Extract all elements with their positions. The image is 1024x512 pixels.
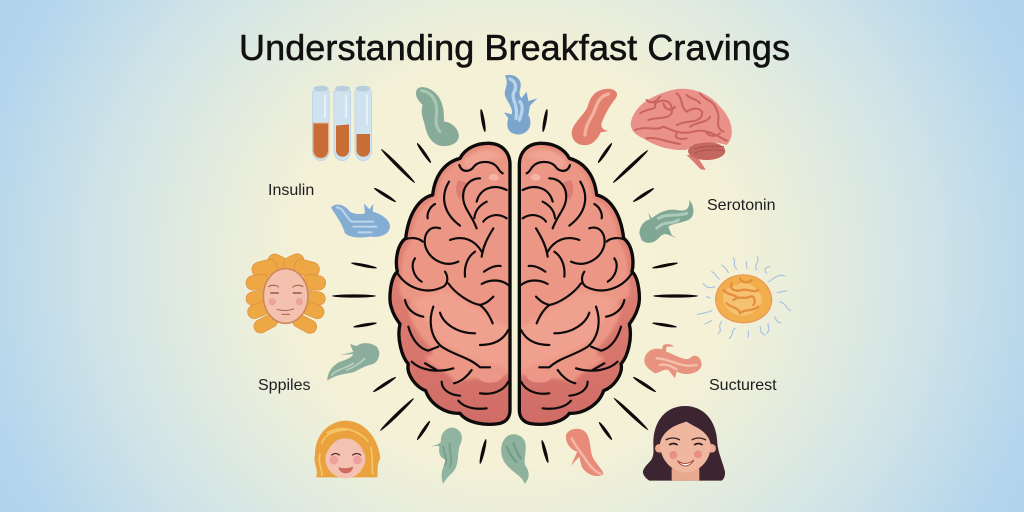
icon: green wisp left (327, 343, 379, 381)
label: Serotonin: Serotonin (707, 197, 776, 214)
icon: orange sun brain (697, 257, 791, 338)
label: Insulin: Insulin (268, 182, 314, 199)
title: Understanding Breakfast Cravings (239, 27, 790, 68)
label: Sucturest: Sucturest (709, 377, 777, 394)
icon: blue glove shape (331, 203, 390, 238)
icon: smiling dark-haired woman (643, 406, 725, 481)
icon: pink wisp right (644, 344, 702, 378)
icon: green squiggle top (416, 87, 459, 146)
icon: red squiggle top (572, 89, 617, 145)
icon: side view brain (631, 89, 732, 170)
icon: blue flame (504, 75, 537, 134)
right hemisphere (516, 143, 639, 424)
icon: face with curls (245, 252, 327, 336)
central brain (390, 143, 639, 424)
left hemisphere (390, 143, 513, 424)
icon: pink tongue bottom (566, 429, 603, 476)
label: Sppiles: Sppiles (258, 377, 310, 394)
radiating rays (332, 109, 698, 464)
icon: green jelly bottom left (431, 428, 462, 484)
icon: green blob right (639, 200, 693, 243)
icon: smiling blonde face (314, 421, 380, 478)
icon: test tubes (312, 86, 372, 160)
icon: green jelly bottom centre (501, 434, 529, 484)
